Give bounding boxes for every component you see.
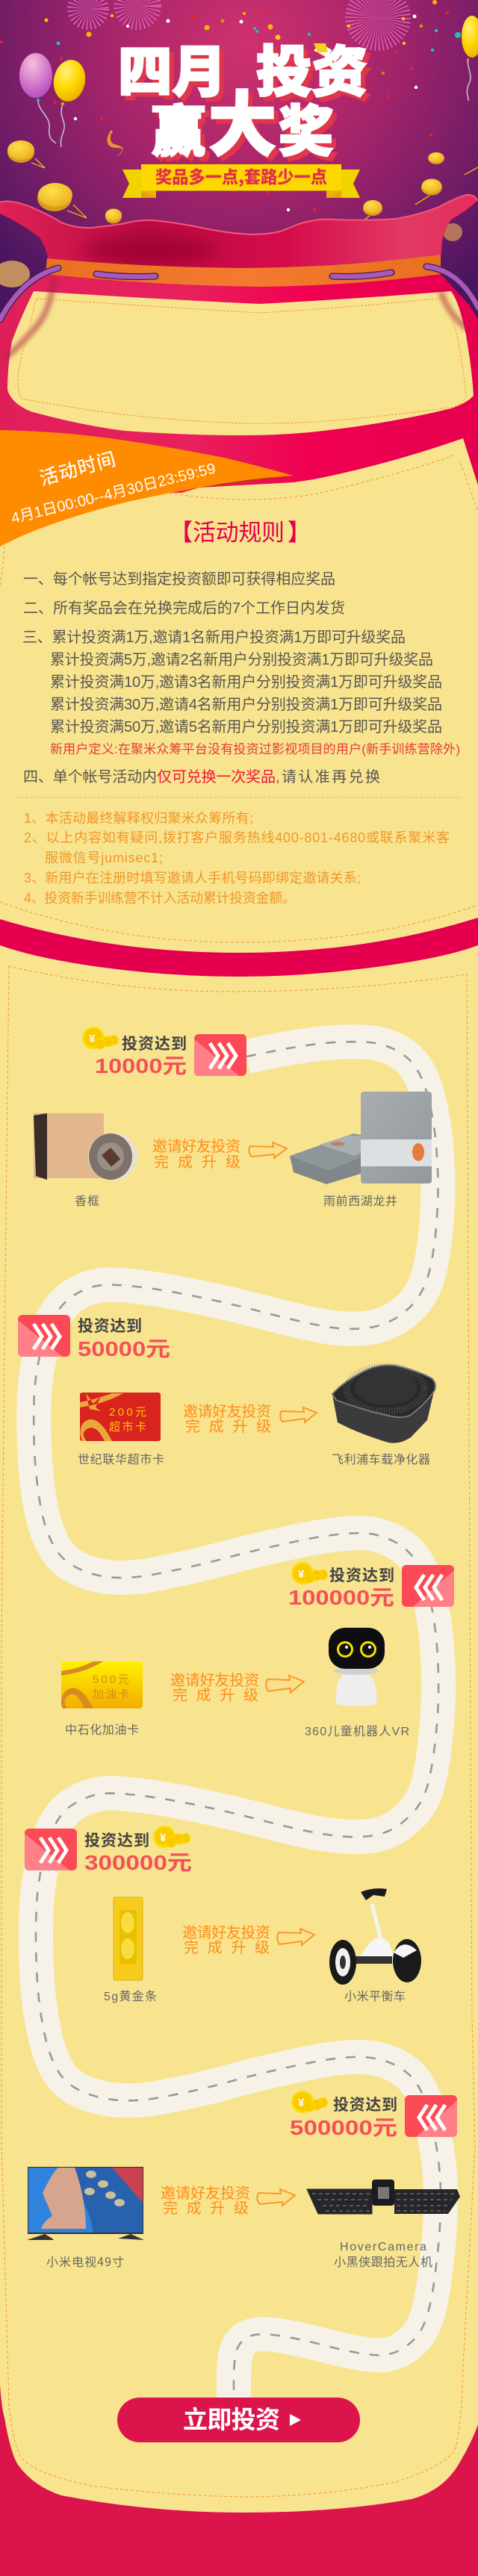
rules heading bbox=[170, 514, 311, 547]
upgrade text: 邀请好友投资 bbox=[182, 1924, 270, 1941]
product: supermarket card: 超市卡 bbox=[109, 1419, 146, 1434]
rules list: 二、所有奖品会在兑换完成后的7个工作日内发货 bbox=[23, 600, 345, 617]
milestone amount: 50000元 bbox=[78, 1337, 170, 1360]
rules list: ,请认准再兑换 bbox=[276, 768, 380, 785]
product: fuel card: 500元 bbox=[93, 1673, 129, 1686]
rules list: 四、单个帐号活动内 bbox=[23, 768, 157, 785]
rules heading: 】 bbox=[288, 514, 311, 547]
fireworks bbox=[78, 0, 394, 34]
product label: 360儿童机器人VR bbox=[305, 1724, 409, 1738]
product label: 世纪联华超市卡 bbox=[78, 1449, 164, 1467]
product label: 5g黄金条 bbox=[104, 1990, 157, 2003]
arrow bbox=[277, 1929, 314, 1945]
notes list: 服微信号jumisec1; bbox=[45, 850, 163, 865]
milestone label: 投资达到 bbox=[84, 1829, 149, 1851]
pouch body bbox=[0, 274, 478, 493]
upgrade text: 完成升级 bbox=[185, 1418, 271, 1435]
confetti dots bbox=[0, 0, 469, 211]
notes list: 2、以上内容如有疑问,拨打客户服务热线400-801-4680或联系聚米客 bbox=[24, 830, 450, 845]
rules list: 累计投资满10万,邀请3名新用户分别投资满1万即可升级奖品 bbox=[50, 673, 442, 691]
arrow bbox=[280, 1407, 317, 1422]
product: hover camera drone bbox=[307, 2180, 460, 2214]
product: supermarket card bbox=[80, 1393, 161, 1441]
notes list: 1、本活动最终解释权归聚米众筹所有; bbox=[24, 811, 253, 826]
pink divider band bbox=[0, 918, 478, 977]
milestone amount: 100000元 bbox=[288, 1586, 394, 1609]
title: 大 bbox=[208, 69, 276, 170]
pocket stitching bbox=[18, 298, 466, 423]
icon: coins bbox=[291, 1562, 327, 1584]
rules list: 一、每个帐号达到指定投资额即可获得相应奖品 bbox=[23, 570, 335, 588]
product: longjing tea tins bbox=[290, 1092, 432, 1184]
banner ribbon bbox=[122, 163, 360, 198]
call to action button: 立即投资 bbox=[183, 2400, 280, 2436]
rules list: 累计投资满5万,邀请2名新用户分别投资满1万即可升级奖品 bbox=[50, 651, 433, 668]
product row 2 bbox=[78, 1365, 435, 1467]
title accent stroke bbox=[314, 43, 328, 52]
product label: 小米电视49寸 bbox=[46, 2252, 124, 2270]
upgrade text bbox=[183, 1403, 271, 1435]
product: fuel card bbox=[61, 1661, 143, 1708]
product: supermarket card: 200元 bbox=[109, 1406, 146, 1419]
product label: 小米平衡车 bbox=[344, 1986, 406, 2004]
pouch collar flap bbox=[0, 195, 477, 270]
upgrade text bbox=[170, 1672, 259, 1704]
upgrade text: 完成升级 bbox=[184, 1939, 270, 1956]
product: balance scooter bbox=[329, 1888, 421, 1985]
product: incense box bbox=[34, 1113, 137, 1180]
product row 1 bbox=[34, 1092, 432, 1209]
product: gold bar bbox=[114, 1897, 143, 1980]
rules list: 新用户定义:在聚米众筹平台没有投资过影视项目的用户(新手训练营除外) bbox=[50, 742, 460, 756]
upgrade text bbox=[161, 2185, 250, 2217]
badge with arrows bbox=[25, 1829, 77, 1870]
rules list: 累计投资满30万,邀请4名新用户分别投资满1万即可升级奖品 bbox=[50, 696, 442, 713]
product: car air purifier bbox=[332, 1365, 435, 1443]
upgrade text: 完成升级 bbox=[163, 2200, 249, 2217]
rules heading: 活动规则 bbox=[193, 514, 285, 547]
orange time ribbon: 活动时间 bbox=[37, 444, 118, 491]
icon: coins bbox=[291, 2091, 327, 2113]
call to action button bbox=[117, 2398, 360, 2442]
rules list: 累计投资满50万,邀请5名新用户分别投资满1万即可升级奖品 bbox=[50, 718, 442, 735]
upgrade text bbox=[152, 1138, 240, 1171]
title: 四月 bbox=[118, 28, 226, 108]
rules list: 仅可兑换一次奖品 bbox=[157, 768, 276, 785]
product: television bbox=[27, 2167, 144, 2240]
drawstring ropes bbox=[0, 267, 478, 320]
milestone 3 bbox=[288, 1562, 454, 1609]
icon: coins: ¥ bbox=[298, 2097, 305, 2109]
product label: 中石化加油卡 bbox=[65, 1720, 139, 1737]
icon: coins bbox=[82, 1027, 118, 1049]
rules heading: 【 bbox=[170, 514, 193, 547]
milestone label: 投资达到 bbox=[333, 2093, 397, 2115]
rules list bbox=[22, 570, 460, 785]
title: 投资 bbox=[256, 28, 367, 108]
badge with arrows bbox=[405, 2095, 457, 2137]
badge with arrows bbox=[402, 1565, 454, 1607]
milestone 1 bbox=[82, 1027, 246, 1077]
rules panel stitching bbox=[0, 455, 478, 942]
title: 赢 bbox=[152, 87, 205, 167]
milestone amount: 500000元 bbox=[290, 2116, 397, 2139]
milestone amount: 10000元 bbox=[95, 1054, 187, 1077]
product row 4 bbox=[104, 1888, 421, 2004]
winding road bbox=[34, 1042, 441, 2401]
balloons bbox=[19, 16, 478, 147]
icon: coins: ¥ bbox=[160, 1832, 167, 1844]
arrow bbox=[266, 1676, 304, 1693]
rules panel bbox=[0, 438, 478, 926]
upgrade text: 完成升级 bbox=[154, 1154, 240, 1171]
milestone 4 bbox=[25, 1826, 192, 1874]
product row 5 bbox=[27, 2167, 460, 2270]
badge with arrows bbox=[18, 1315, 70, 1357]
banner ribbon: 奖品多一点,套路少一点 bbox=[155, 163, 327, 188]
product label: 雨前西湖龙井 bbox=[323, 1191, 397, 1209]
upgrade text: 完成升级 bbox=[173, 1687, 258, 1704]
milestone 2 bbox=[18, 1314, 170, 1360]
pouch orange band bbox=[46, 255, 441, 287]
milestone label: 投资达到 bbox=[329, 1564, 394, 1586]
upgrade text bbox=[182, 1924, 270, 1956]
milestone 5 bbox=[290, 2091, 457, 2139]
product label bbox=[334, 2241, 432, 2270]
night sky header background bbox=[0, 0, 478, 343]
product: robot bbox=[329, 1628, 385, 1706]
product row 3 bbox=[61, 1628, 409, 1738]
product label: 飞利浦车载净化器 bbox=[332, 1449, 430, 1467]
upgrade text: 邀请好友投资 bbox=[161, 2185, 250, 2202]
milestone label: 投资达到 bbox=[122, 1032, 187, 1054]
orange time ribbon bbox=[0, 430, 294, 547]
streamer bbox=[108, 130, 123, 158]
product label: HoverCamera bbox=[340, 2241, 426, 2253]
milestone amount: 300000元 bbox=[84, 1851, 192, 1874]
arrow bbox=[257, 2189, 295, 2206]
upgrade text: 邀请好友投资 bbox=[183, 1403, 271, 1420]
notes list: 3、新用户在注册时填写邀请人手机号码即绑定邀请关系; bbox=[24, 871, 361, 886]
title: 奖 bbox=[279, 87, 333, 167]
cream pocket panel bbox=[7, 291, 474, 435]
product: fuel card: 加油卡 bbox=[93, 1686, 129, 1702]
rewards panel stitching bbox=[1, 966, 475, 2497]
notes list bbox=[24, 811, 450, 906]
bottom crimson footer bbox=[0, 2384, 478, 2576]
product label: 香框 bbox=[75, 1191, 99, 1209]
product label: 小黑侠跟拍无人机 bbox=[334, 2252, 432, 2270]
upgrade text: 邀请好友投资 bbox=[152, 1138, 240, 1155]
icon: coins bbox=[153, 1826, 190, 1848]
milestone label: 投资达到 bbox=[78, 1314, 142, 1337]
rope shadows on panel bbox=[4, 278, 467, 358]
title bbox=[118, 28, 367, 170]
rules divider bbox=[16, 797, 462, 798]
icon: coins: ¥ bbox=[89, 1033, 96, 1045]
icon: coins: ¥ bbox=[298, 1568, 305, 1581]
rules list: 三、累计投资满1万,邀请1名新用户投资满1万即可升级奖品 bbox=[22, 629, 406, 646]
badge with arrows bbox=[194, 1034, 246, 1076]
arrow bbox=[249, 1142, 287, 1158]
upgrade text: 邀请好友投资 bbox=[170, 1672, 259, 1689]
orange time ribbon: 4月1日00:00--4月30日23:59:59 bbox=[10, 461, 217, 527]
notes list: 4、投资新手训练营不计入活动累计投资金额。 bbox=[24, 891, 296, 906]
gold coins bbox=[0, 140, 478, 287]
